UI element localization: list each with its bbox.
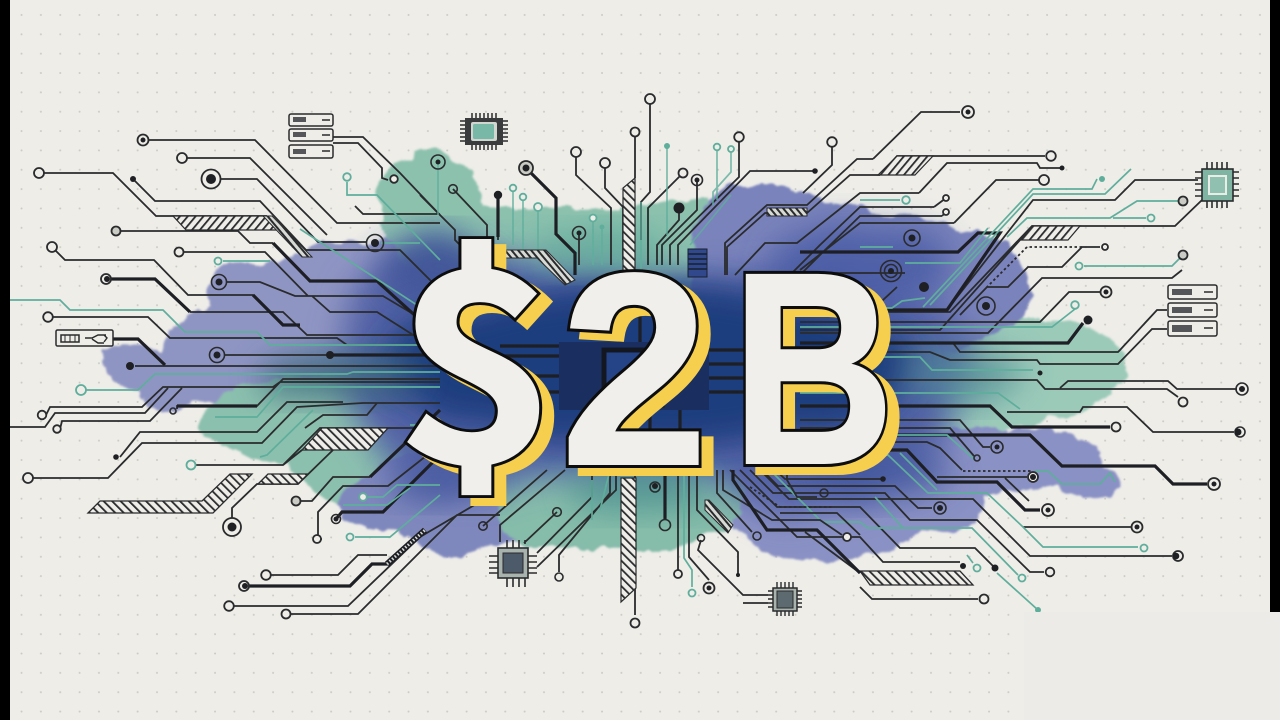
black letter outline: $ — [396, 159, 556, 537]
blue upper-left wash — [380, 236, 500, 304]
headline figure: $2B — [396, 159, 906, 545]
indigo wash: bottom right — [720, 410, 1121, 561]
blue lower-left wash — [390, 458, 490, 502]
deep navy core — [380, 285, 920, 445]
circuit traces: left side — [10, 137, 500, 614]
teal wash: bottom centre — [498, 440, 742, 552]
icon: teal microchip, top right — [1195, 162, 1239, 208]
circuit traces: bottom — [483, 470, 860, 615]
hatched vertical bus: top — [623, 178, 635, 272]
white letter faces: B — [732, 216, 894, 520]
teal wash: top — [378, 149, 730, 300]
icon: dark microchip, bottom right — [768, 582, 802, 616]
icon: dark microchip, bottom left — [489, 540, 537, 587]
indigo wash: core base — [341, 252, 970, 521]
teal right band — [900, 347, 1020, 403]
white letter faces: 2 — [561, 217, 708, 521]
teal bottom centre wash — [570, 466, 710, 514]
teal top centre wash — [530, 228, 670, 272]
white letter faces — [396, 159, 894, 537]
icon: USB connector module — [56, 330, 113, 346]
icon: teal microchip, top left — [460, 113, 508, 150]
teal wash: left lower — [200, 373, 440, 508]
icon: server rack, upper left — [289, 114, 333, 158]
yellow offset shadow — [408, 167, 906, 545]
yellow offset shadow: $ — [408, 167, 568, 545]
blue lower-right wash — [810, 440, 950, 500]
indigo wash: top right — [680, 186, 1031, 350]
central microchip behind the figure — [500, 300, 780, 450]
blue upper-right wash — [770, 220, 950, 310]
hatched bus bands: right — [860, 156, 1080, 585]
circuit nodes: rings and terminals — [23, 94, 1248, 628]
hatched block: top centre — [688, 249, 707, 277]
icon: server rack, right — [1168, 285, 1217, 336]
watercolor splash — [102, 149, 1126, 561]
black letter outline: B — [732, 216, 894, 520]
slate-teal left band — [260, 351, 420, 399]
black letter outline — [396, 159, 894, 537]
teal wash: right — [880, 319, 1126, 430]
circuit traces: right side — [730, 112, 1237, 610]
yellow offset shadow: 2 — [573, 225, 720, 529]
yellow offset shadow: B — [744, 224, 906, 528]
circuit traces: top — [420, 99, 954, 285]
hatched bus bands: left — [88, 216, 388, 513]
white letter faces: $ — [396, 159, 556, 537]
indigo wash: left — [102, 238, 520, 411]
indigo wash: bottom left — [335, 440, 560, 558]
black letter outline: 2 — [561, 217, 708, 521]
